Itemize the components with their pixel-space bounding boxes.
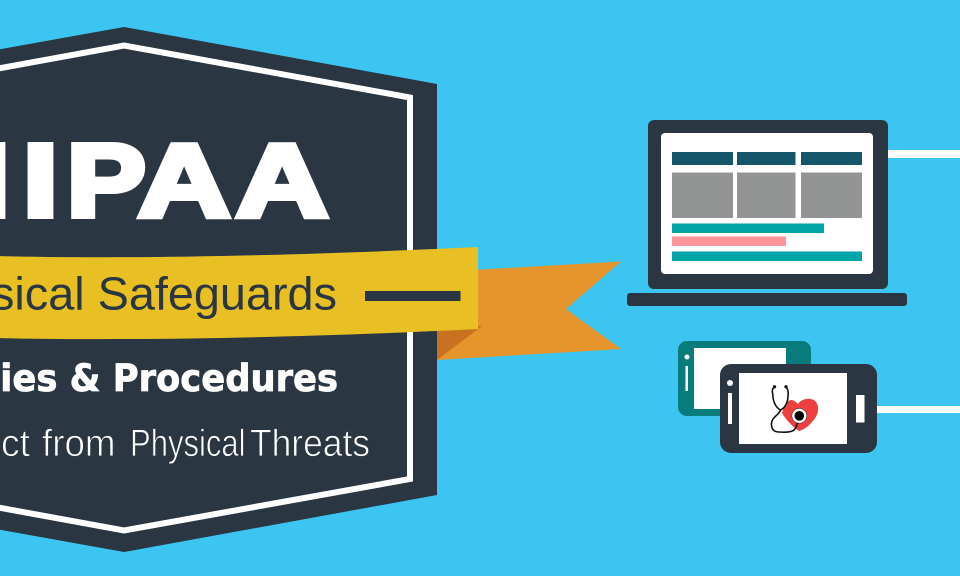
- tagline: from: [42, 423, 116, 465]
- title: HIPAA: A: [236, 123, 328, 238]
- tagline: Physical: [130, 423, 246, 465]
- title: HIPAA: [0, 123, 328, 238]
- banner dash: [365, 291, 460, 301]
- icon: heart with stethoscope: [771, 385, 818, 432]
- ribbon tail: [437, 262, 621, 360]
- tagline: Threats: [250, 423, 370, 465]
- badge: [0, 27, 437, 552]
- title: HIPAA: P: [67, 123, 146, 238]
- tagline: [0, 423, 370, 465]
- yellow banner: [0, 247, 478, 339]
- connector line: phone: [870, 406, 960, 413]
- icon: front phone: [720, 364, 877, 453]
- title: HIPAA: A: [138, 123, 230, 238]
- icon: laptop: [627, 120, 907, 306]
- connector line: laptop: [880, 150, 960, 158]
- icon: back phone: [678, 341, 811, 416]
- title: HIPAA: I: [23, 123, 58, 238]
